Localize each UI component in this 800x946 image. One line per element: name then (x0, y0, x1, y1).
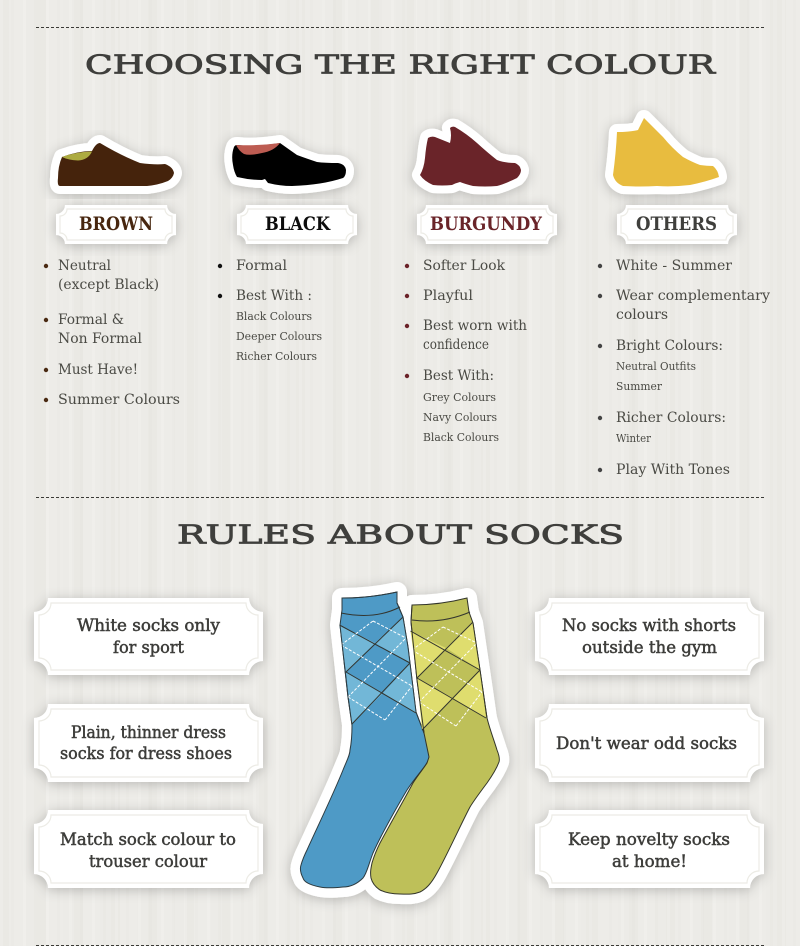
list: brown: Summer Colours (58, 392, 180, 408)
label: black: BLACK (265, 213, 331, 235)
sticker backing (300, 592, 499, 894)
list: brown (44, 258, 180, 408)
icon: black shoe (232, 143, 346, 186)
callout: match sock colour: trouser colour (89, 852, 207, 871)
heading: rules about socks: RULES ABOUT SOCKS (177, 520, 624, 550)
blue sock (300, 592, 429, 888)
callout: plain thinner dress socks: Plain, thinner dress (71, 723, 226, 742)
list: black (218, 258, 322, 363)
list: others: Wear complementary (616, 288, 770, 304)
list: others: Richer Colours: (616, 410, 726, 426)
list: brown: Formal & (58, 312, 124, 328)
list: burgundy: Black Colours (423, 431, 499, 444)
callout: no socks with shorts: outside the gym (582, 638, 717, 657)
panel: black shoes (218, 143, 357, 363)
list: others: colours (616, 307, 668, 323)
callout: plain thinner dress socks: socks for dress shoes (60, 744, 232, 763)
list: brown: Must Have! (58, 362, 138, 378)
label: brown (56, 205, 176, 244)
green sock (371, 598, 499, 894)
icon: yellow shoe (613, 118, 719, 186)
list: burgundy: Grey Colours (423, 391, 496, 404)
list: others: Winter (616, 432, 652, 445)
icon: brown shoe (58, 143, 174, 186)
list: others: Summer (616, 380, 663, 393)
callout: don't wear odd socks: Don't wear odd socks (556, 734, 737, 753)
callout: don't wear odd socks (535, 704, 764, 782)
callout: keep novelty socks at home (535, 810, 764, 888)
list: black: Richer Colours (236, 350, 317, 363)
title: choosing the right colour: CHOOSING THE RIGHT COLOUR (85, 50, 717, 80)
label: burgundy: BURGUNDY (430, 213, 542, 235)
label: brown: BROWN (79, 213, 153, 235)
list: brown: (except Black) (58, 277, 159, 293)
callout: match sock colour (34, 810, 263, 888)
list: brown: Non Formal (58, 331, 143, 347)
callout: keep novelty socks at home: Keep novelty socks (568, 830, 730, 849)
callout: no socks with shorts (535, 598, 764, 675)
panel: brown shoes (44, 143, 180, 408)
list: black: Formal (236, 258, 288, 274)
list: others: White - Summer (616, 258, 732, 274)
list: brown: Neutral (58, 258, 111, 274)
label: others: OTHERS (636, 213, 717, 235)
list: others: Neutral Outfits (616, 360, 696, 373)
callout: match sock colour: Match sock colour to (60, 830, 236, 849)
list: burgundy: Best worn with (423, 318, 527, 334)
list: black: Best With : (236, 288, 312, 304)
label: black (237, 205, 357, 244)
panel: burgundy shoes (405, 127, 557, 444)
list: burgundy: Playful (423, 288, 474, 304)
list: black: Deeper Colours (236, 330, 322, 343)
icon: burgundy shoe (420, 127, 521, 186)
list: burgundy: Softer Look (423, 258, 505, 274)
callout: white socks only for sport: White socks only (77, 616, 221, 635)
callout: keep novelty socks at home: at home! (612, 852, 687, 871)
callout: white socks only for sport (34, 598, 263, 675)
list: others (598, 258, 770, 478)
label: others (617, 205, 737, 244)
list: others: Play With Tones (616, 462, 730, 478)
list: black: Black Colours (236, 310, 312, 323)
label: burgundy (417, 205, 557, 244)
illustration: pair of argyle socks (300, 592, 499, 894)
callout: no socks with shorts: No socks with shorts (562, 616, 736, 635)
list: burgundy: confidence (423, 337, 489, 353)
list: burgundy (405, 258, 527, 444)
panel: other shoes (598, 118, 770, 478)
list: burgundy: Best With: (423, 368, 494, 384)
list: others: Bright Colours: (616, 338, 723, 354)
callout: plain thinner dress socks (34, 704, 263, 782)
list: burgundy: Navy Colours (423, 411, 497, 424)
callout: white socks only for sport: for sport (113, 638, 184, 657)
